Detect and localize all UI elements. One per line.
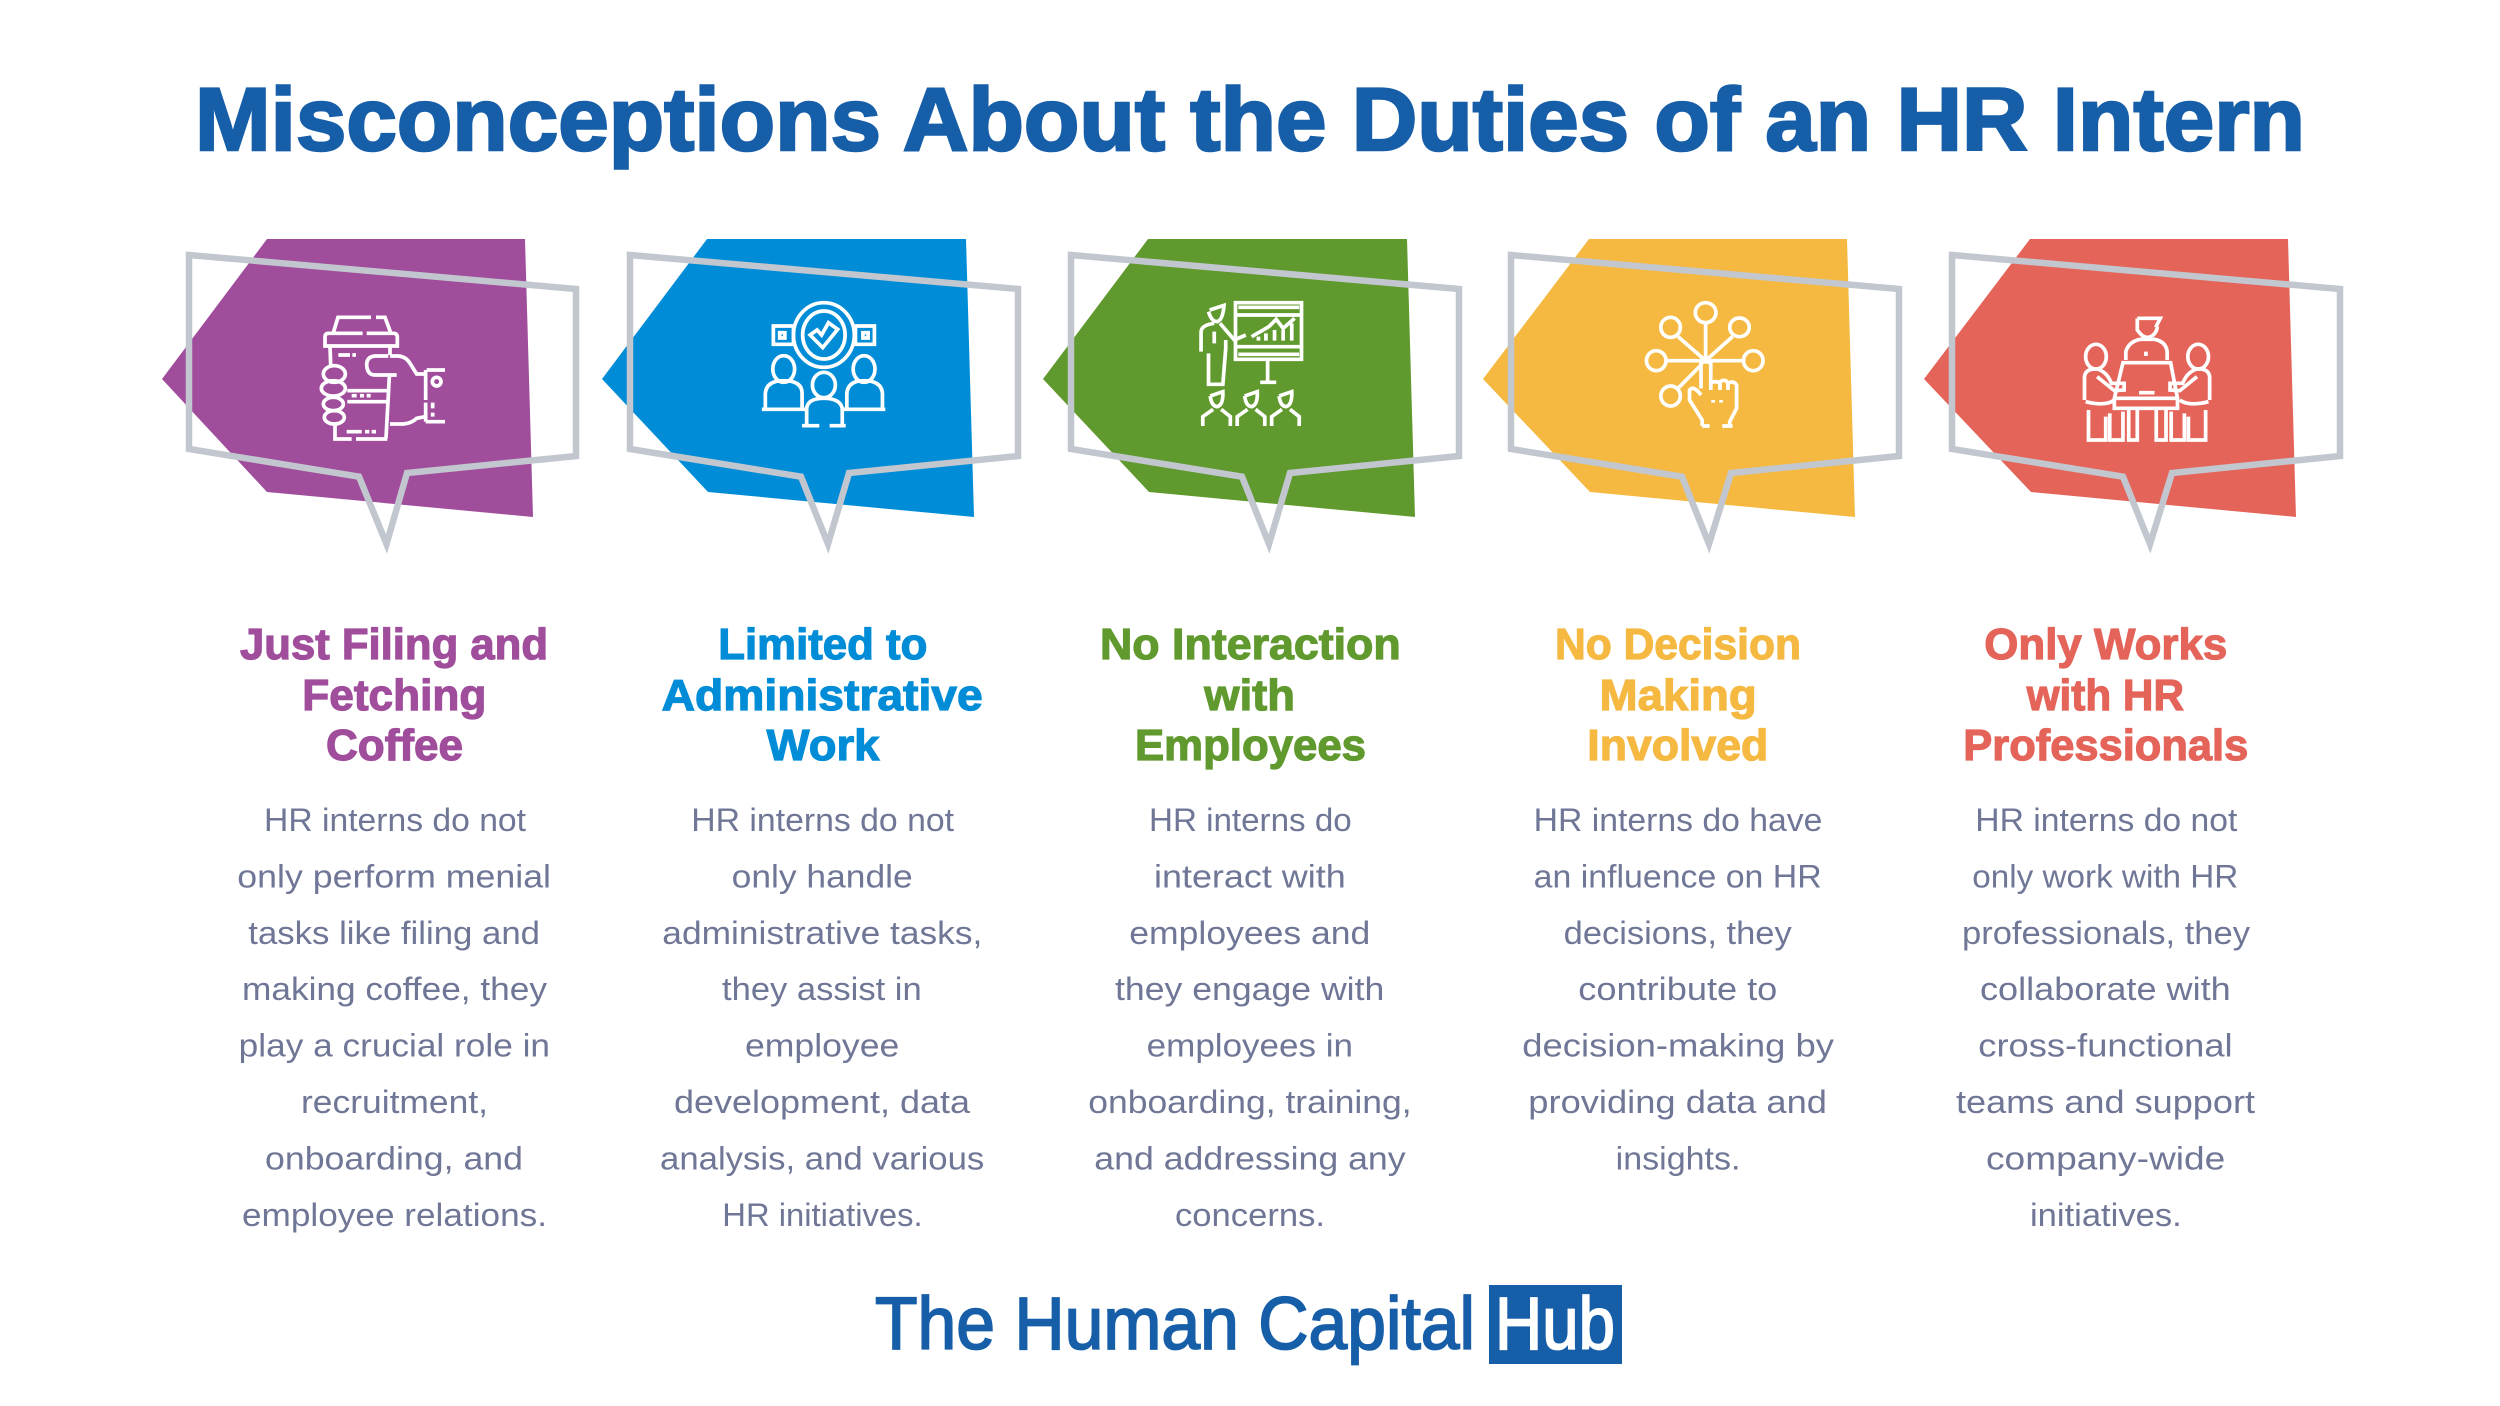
icon: people meeting at a table bbox=[2084, 318, 2210, 440]
body text: they assist in bbox=[722, 971, 922, 1007]
heading: Coffee bbox=[326, 721, 463, 770]
body text: recruitment, bbox=[301, 1084, 488, 1120]
body text: company-wide bbox=[1986, 1140, 2225, 1176]
heading: Making bbox=[1600, 671, 1757, 720]
body text: HR interns do not bbox=[264, 802, 526, 838]
body text: collaborate with bbox=[1980, 971, 2231, 1007]
purple shape bbox=[162, 239, 533, 517]
heading bbox=[1963, 620, 2248, 770]
heading: No Decision bbox=[1555, 620, 1801, 669]
body text: employee relations. bbox=[242, 1197, 547, 1233]
heading bbox=[1100, 620, 1401, 770]
heading: Involved bbox=[1587, 721, 1768, 770]
body text: HR interns do bbox=[1149, 802, 1352, 838]
body text: development, data bbox=[674, 1084, 970, 1120]
heading: Work bbox=[767, 721, 880, 770]
body text bbox=[237, 802, 551, 1233]
body text: professionals, they bbox=[1962, 915, 2250, 951]
speech bubble frame bbox=[189, 255, 576, 544]
body text: and addressing any bbox=[1094, 1140, 1406, 1176]
body text: only perform menial bbox=[237, 858, 551, 894]
heading bbox=[1555, 620, 1801, 770]
heading: with bbox=[1203, 671, 1295, 720]
speech bubble frame bbox=[1952, 255, 2340, 544]
body text: initiatives. bbox=[2030, 1197, 2182, 1233]
body text: HR interns do not bbox=[1975, 802, 2237, 838]
panel: no interaction with employees bbox=[1043, 239, 1459, 1233]
panel: no decision making involved bbox=[1483, 239, 1899, 1176]
body text: they engage with bbox=[1115, 971, 1384, 1007]
icon: presenter with audience bbox=[1201, 303, 1302, 426]
body text: tasks like filing and bbox=[248, 915, 540, 951]
logo: The Human Capital Hub: Hub bbox=[1495, 1282, 1615, 1365]
body text: onboarding, training, bbox=[1088, 1084, 1412, 1120]
body text: play a crucial role in bbox=[239, 1028, 550, 1064]
speech bubble frame bbox=[1071, 255, 1459, 544]
body text bbox=[1956, 802, 2255, 1233]
body text: teams and support bbox=[1956, 1084, 2255, 1120]
body text: administrative tasks, bbox=[662, 915, 982, 951]
blue shape bbox=[602, 239, 974, 517]
heading: Only Works bbox=[1984, 620, 2227, 669]
body text: employees in bbox=[1147, 1028, 1353, 1064]
logo: The Human Capital Hub: The Human Capital bbox=[875, 1282, 1475, 1365]
heading: Limited to bbox=[718, 620, 927, 669]
body text: making coffee, they bbox=[242, 971, 547, 1007]
icon: hand touching network bbox=[1646, 303, 1763, 426]
body text bbox=[1088, 802, 1412, 1233]
heading: Fetching bbox=[302, 671, 486, 720]
body text: cross-functional bbox=[1978, 1028, 2233, 1064]
body text: HR interns do have bbox=[1534, 802, 1822, 838]
body text: providing data and bbox=[1528, 1084, 1827, 1120]
icon: hand holding coffee bbox=[321, 317, 445, 439]
heading bbox=[240, 620, 548, 770]
red shape bbox=[1924, 239, 2296, 517]
heading: Just Filing and bbox=[240, 620, 548, 669]
heading: with HR bbox=[2026, 671, 2184, 720]
green shape bbox=[1043, 239, 1415, 517]
body text: onboarding, and bbox=[265, 1140, 523, 1176]
body text: employee bbox=[745, 1028, 899, 1064]
body text: insights. bbox=[1616, 1140, 1740, 1176]
body text: only work with HR bbox=[1972, 858, 2238, 894]
heading: Professionals bbox=[1963, 721, 2248, 770]
heading: No Interaction bbox=[1100, 620, 1401, 669]
heading bbox=[662, 620, 983, 770]
body text: employees and bbox=[1129, 915, 1370, 951]
body text: contribute to bbox=[1578, 971, 1777, 1007]
body text: an influence on HR bbox=[1534, 858, 1822, 894]
body text bbox=[1522, 802, 1834, 1176]
body text bbox=[660, 802, 984, 1233]
body text: concerns. bbox=[1175, 1197, 1325, 1233]
body text: analysis, and various bbox=[660, 1140, 984, 1176]
speech bubble frame bbox=[1511, 255, 1899, 544]
body text: only handle bbox=[732, 858, 913, 894]
heading: Administrative bbox=[662, 671, 983, 720]
icon: team with approval badge bbox=[762, 303, 885, 426]
panel: limited to administrative work bbox=[602, 239, 1018, 1233]
body text: HR interns do not bbox=[691, 802, 954, 838]
panel: just filing and fetching coffee bbox=[162, 239, 576, 1233]
body text: HR initiatives. bbox=[722, 1197, 923, 1233]
title: Misconceptions About the Duties of an HR Intern bbox=[195, 69, 2305, 169]
speech bubble frame bbox=[630, 255, 1018, 544]
body text: interact with bbox=[1154, 858, 1346, 894]
panel: only works with hr professionals bbox=[1924, 239, 2340, 1233]
heading: Employees bbox=[1135, 721, 1366, 770]
body text: decision-making by bbox=[1522, 1028, 1834, 1064]
yellow shape bbox=[1483, 239, 1855, 517]
body text: decisions, they bbox=[1564, 915, 1792, 951]
